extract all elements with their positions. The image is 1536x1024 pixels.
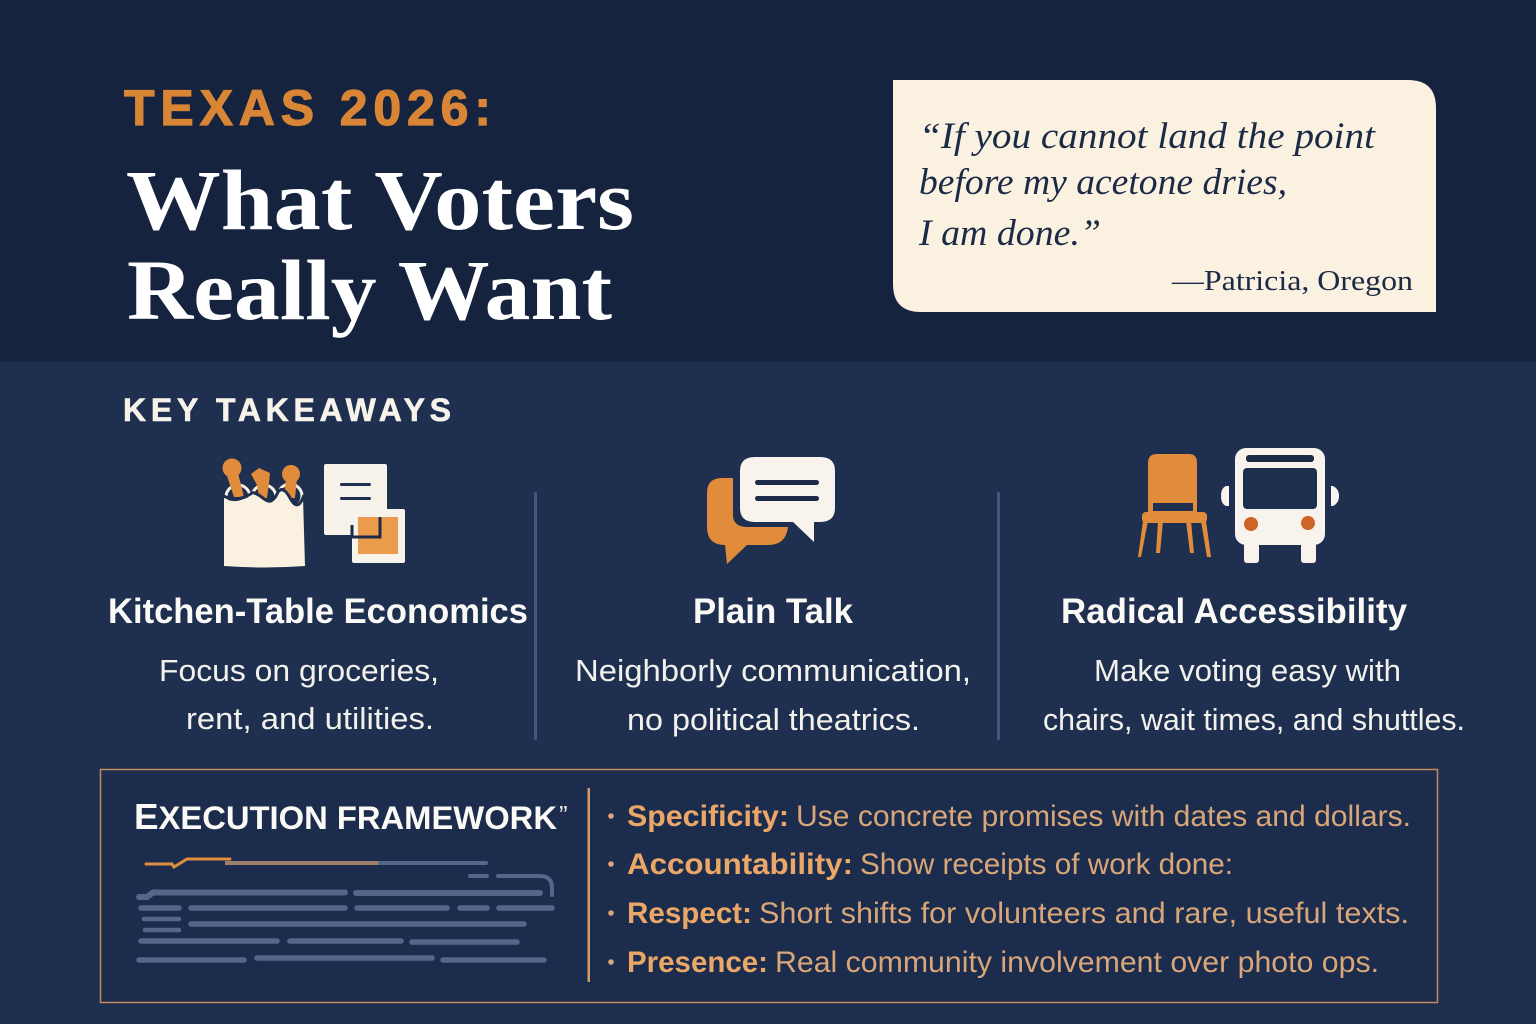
description: no political theatrics. (627, 702, 920, 737)
stray quote mark: ” (559, 800, 568, 830)
quote attribution: —Patricia, Oregon (1171, 265, 1414, 297)
item: respect: Short shifts for volunteers and rare, useful texts. (759, 897, 1409, 930)
description: chairs, wait times, and shuttles. (1043, 702, 1465, 737)
quote text: “If you cannot land the point (919, 116, 1377, 157)
quote text: before my acetone dries, (919, 162, 1287, 203)
item: accountability: Show receipts of work done: (860, 848, 1233, 881)
heading: Radical Accessibility (1061, 592, 1408, 631)
description: Focus on groceries, (159, 653, 439, 688)
vertical divider (588, 788, 590, 982)
icon: chair (1138, 454, 1211, 557)
panel: execution framework (100, 770, 1438, 1002)
heading: Kitchen-Table Economics (108, 592, 528, 631)
title (126, 152, 634, 338)
item: accountability: Accountability: (627, 848, 853, 881)
item: presence: Real community involvement over photo ops. (775, 946, 1379, 979)
description: Neighborly communication, (575, 653, 971, 688)
title: Really Want (127, 242, 612, 338)
description (1043, 653, 1465, 737)
item: specificity: Use concrete promises with dates and dollars. (796, 800, 1411, 833)
icon: grocery bag and documents (222, 458, 405, 568)
item: respect: Respect: (627, 897, 752, 930)
framework list (608, 800, 1411, 979)
placeholder text lines (139, 859, 552, 960)
quote text (918, 116, 1377, 254)
quote card (893, 80, 1436, 312)
description (575, 653, 971, 737)
item: presence: Presence: (627, 946, 768, 979)
description (159, 653, 439, 736)
column: kitchen-table economics (108, 458, 528, 736)
title: What Voters (126, 152, 634, 248)
item: specificity: Specificity: (627, 800, 789, 833)
description: rent, and utilities. (186, 701, 434, 736)
header band (0, 0, 1536, 362)
icon: bus (1221, 448, 1339, 563)
item: accountability (608, 848, 1233, 881)
framework heading: EXECUTION FRAMEWORK (134, 796, 557, 837)
quote text: I am done.” (918, 213, 1101, 254)
icon: speech bubbles (707, 457, 835, 564)
eyebrow: Texas 2026: TEXAS 2026: (124, 80, 491, 136)
icon: chair and bus (1138, 448, 1339, 563)
section heading: key takeaways: KEY TAKEAWAYS (123, 392, 451, 428)
column: plain talk (575, 457, 971, 737)
heading: Plain Talk (693, 592, 854, 631)
column: radical accessibility (1043, 448, 1465, 737)
description: Make voting easy with (1094, 653, 1401, 688)
